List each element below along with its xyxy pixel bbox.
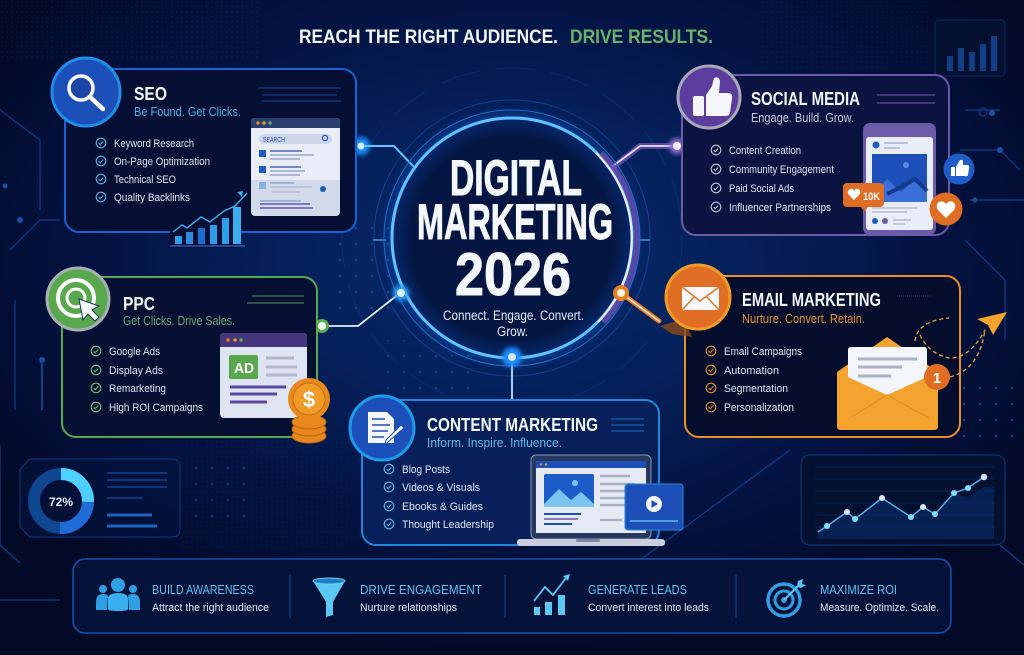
icon: envelope: [660, 265, 730, 337]
Content Marketing heading: CONTENT MARKETING: [427, 415, 598, 435]
connector: SEO to hub: [352, 137, 413, 166]
connector: Email to hub: [613, 285, 659, 321]
ad window: [220, 333, 307, 418]
ad window: AD: [234, 360, 254, 377]
icon: target and cursor: [47, 268, 109, 330]
panel: Content Marketing: [350, 396, 683, 546]
Social Media list: Influencer Partnerships: [729, 202, 831, 214]
badge: heart: [930, 192, 962, 226]
paper plane with dashed path: [915, 312, 1007, 377]
PPC list: Display Ads: [109, 365, 163, 377]
connector: Social Media to hub: [612, 138, 685, 168]
Email Marketing list: [706, 346, 802, 414]
Email Marketing heading: EMAIL MARKETING: [742, 290, 881, 310]
benefit: maximize ROI: Measure. Optimize. Scale.: [820, 602, 939, 614]
SEO list: [96, 138, 210, 204]
PPC list: [91, 346, 203, 414]
hub tagline: [443, 308, 584, 339]
benefit: generate leads: Convert interest into leads: [588, 602, 709, 614]
icon: target with arrow: [768, 579, 806, 616]
benefit: build awareness: [96, 578, 269, 614]
panel: SEO: [52, 58, 356, 248]
hub tagline: Connect. Engage. Convert.: [443, 308, 584, 323]
coin stack: $: [303, 387, 315, 412]
benefit: drive engagement: Nurture relationships: [360, 602, 457, 614]
bottom benefits bar: [73, 559, 951, 633]
Email Marketing tagline: Nurture. Convert. Retain.: [742, 311, 865, 326]
top headline: [299, 27, 713, 48]
Social Media list: Community Engagement: [729, 164, 834, 176]
line chart widget: [801, 455, 1005, 545]
Social Media list: [711, 145, 834, 214]
donut value: 72%: [49, 495, 73, 509]
benefit: build awareness: Attract the right audience: [152, 602, 269, 614]
badge: thumbs up: [944, 154, 974, 184]
top-right bar chart decoration: [935, 20, 1005, 76]
PPC list: Google Ads: [109, 346, 160, 358]
Content Marketing list: Thought Leadership: [402, 519, 494, 531]
hub title: DIGITAL: [450, 150, 582, 206]
panel: Email Marketing: [660, 265, 1007, 437]
benefit: drive engagement: DRIVE ENGAGEMENT: [360, 583, 482, 597]
Content Marketing list: Blog Posts: [402, 464, 450, 476]
Email Marketing list: Personalization: [724, 402, 794, 414]
Email Marketing list: Email Campaigns: [724, 346, 802, 358]
Content Marketing list: [384, 464, 494, 531]
PPC list: Remarketing: [109, 383, 166, 395]
SEO tagline: Be Found. Get Clicks.: [134, 104, 241, 119]
icon: document and pencil: [350, 396, 414, 460]
coin stack: [288, 378, 330, 443]
PPC heading: PPC: [123, 294, 155, 314]
SEO list: Technical SEO: [114, 174, 176, 186]
Email Marketing list: Automation: [724, 365, 779, 377]
benefit: generate leads: GENERATE LEADS: [588, 583, 687, 597]
benefit: build awareness: BUILD AWARENESS: [152, 583, 254, 597]
SEO list: Keyword Research: [114, 138, 194, 150]
icon: rising chart: [534, 574, 570, 615]
Content Marketing tagline: Inform. Inspire. Influence.: [427, 435, 562, 450]
SEO heading: SEO: [134, 84, 167, 104]
open envelope illustration: [837, 337, 950, 430]
central hub ring: [384, 110, 640, 366]
badge: 10K likes: 10K: [863, 191, 880, 203]
PPC tagline: Get Clicks. Drive Sales.: [123, 314, 235, 328]
donut widget: [20, 459, 180, 537]
phone mockup: [863, 123, 936, 235]
benefit: maximize ROI: [768, 579, 939, 616]
top headline: DRIVE RESULTS.: [570, 27, 713, 48]
search results window: SEARCH: [263, 137, 285, 144]
SEO list: On-Page Optimization: [114, 156, 210, 168]
hub title: MARKETING: [417, 194, 613, 250]
icon: funnel: [313, 578, 345, 617]
badge: 10K likes: [843, 183, 884, 212]
connector: Content to hub: [502, 347, 522, 401]
icon: thumbs up: [678, 66, 740, 128]
search results window: [251, 118, 340, 216]
Social Media list: Paid Social Ads: [729, 183, 794, 195]
benefit: drive engagement: [313, 578, 482, 617]
Social Media tagline: Engage. Build. Grow.: [751, 110, 854, 125]
hub title: 2026: [455, 241, 571, 308]
Social Media list: Content Creation: [729, 145, 801, 157]
hub tagline: Grow.: [497, 324, 528, 339]
icon: magnifier: [52, 58, 120, 126]
growth chart: [170, 191, 247, 248]
laptop with video: [517, 455, 683, 546]
Content Marketing list: Videos & Visuals: [402, 482, 480, 494]
benefit: maximize ROI: MAXIMIZE ROI: [820, 583, 897, 597]
Social Media heading: SOCIAL MEDIA: [751, 89, 860, 109]
open envelope illustration: 1: [933, 370, 941, 387]
panel: PPC: [47, 268, 330, 443]
panel: Social Media: [678, 66, 974, 235]
Content Marketing list: Ebooks & Guides: [402, 501, 483, 513]
Email Marketing list: Segmentation: [724, 383, 788, 395]
SEO list: Quality Backlinks: [114, 192, 190, 204]
benefit: generate leads: [534, 574, 709, 615]
top headline: REACH THE RIGHT AUDIENCE.: [299, 27, 558, 48]
PPC list: High ROI Campaigns: [109, 402, 203, 414]
icon: people: [96, 578, 140, 611]
hub title: [417, 150, 613, 308]
connector: PPC to hub: [315, 293, 400, 333]
